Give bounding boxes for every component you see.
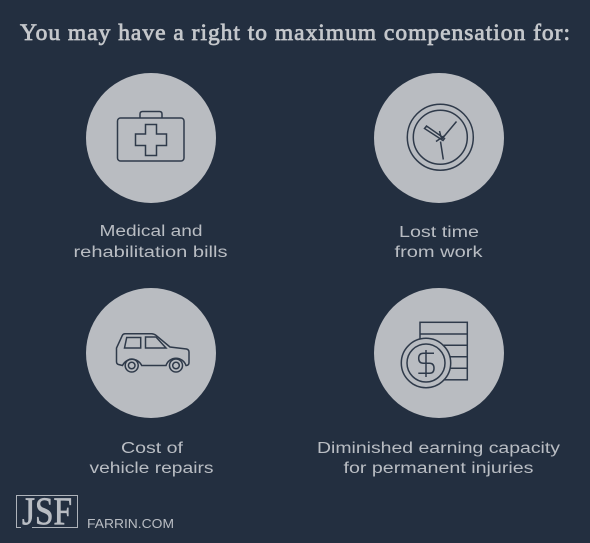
panel: lost time — [374, 73, 504, 261]
icon: car — [86, 288, 216, 418]
title: You may have a right to maximum compensation for: — [20, 20, 570, 46]
icon: first aid kit — [86, 73, 216, 203]
icon: coins — [374, 288, 504, 418]
label: from work: from work — [394, 244, 483, 261]
logo: JSF: JSF — [22, 490, 72, 533]
panel: medical bills — [74, 73, 228, 261]
panel: vehicle repairs — [86, 288, 216, 477]
panel: earning capacity — [317, 288, 560, 477]
label: lost time: Lost time — [399, 224, 479, 241]
label: vehicle repairs: vehicle repairs — [90, 460, 214, 477]
icon: clock — [374, 73, 504, 203]
label: diminished: Diminished earning capacity — [317, 440, 560, 457]
website: farrin.com: FARRIN.COM — [87, 516, 174, 531]
label: cost of: Cost of — [121, 440, 184, 457]
label: medical: Medical and — [100, 223, 202, 240]
label: rehabilitation: rehabilitation bills — [74, 244, 228, 261]
label: permanent injuries: for permanent injuries — [344, 460, 534, 477]
